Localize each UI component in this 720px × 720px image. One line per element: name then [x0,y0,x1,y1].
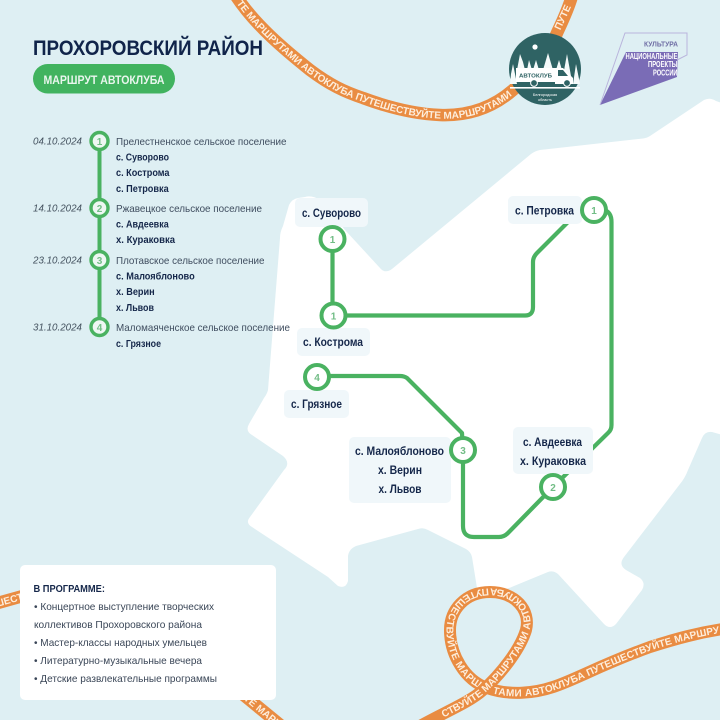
stop: Кострома: 1 [331,311,337,322]
stop: Кострома [322,304,346,328]
label: Грязное [284,390,349,418]
logo: national projects: РОССИИ [653,68,678,78]
label: Авдеевка: х. Кураковка [520,454,586,468]
stop: Петровка: 1 [591,206,597,217]
date 2: Ржавецкое сельское поселение [116,203,262,215]
ribbon: top: ПУТЕ [554,4,571,30]
date 2: 2 [97,204,103,215]
label: Малояблоново: х. Львов [378,482,422,496]
label: Суворово [295,198,368,227]
ribbon: top: ТЕ МАРШРУТАМИ АВТОКЛУБА ПУТЕШЕСТВУЙТЕ МАРШРУТАМИ [238,0,512,119]
route line [317,210,612,537]
program list: • Литературно-музыкальные вечера [34,655,202,667]
title: ПРОХОРОВСКИЙ РАЙОН [33,36,263,60]
date 1 [33,132,287,195]
label: Суворово: с. Суворово [302,206,361,220]
badge: route: МАРШРУТ АВТОКЛУБА [44,73,165,87]
logo: avtoklub: Белгородская [533,93,557,97]
logo: avtoklub: область [538,98,552,102]
date 3: 3 [97,256,103,267]
date 2: х. Кураковка [116,234,175,246]
date 3: 23.10.2024 [32,254,82,266]
date 4: с. Грязное [116,338,161,350]
stop: Петровка [582,198,606,222]
label: Малояблоново: х. Верин [378,463,422,477]
stop: Грязное: 4 [314,373,320,384]
stop: Авдеевка: 2 [550,483,556,494]
ribbon: bottom loop: ПУТЕШЕСТВУЙТЕ МАРШРУТАМИ АВТОКЛУБА ПУТЕШЕСТВУЙТЕ МАРШРУ [446,588,718,696]
logo: national projects: ПРОЕКТЫ [648,59,678,69]
logo: avtoklub [509,33,581,105]
date 4: 31.10.2024 [33,322,82,334]
label: Грязное: с. Грязное [291,397,342,411]
map: district shape [248,99,720,627]
date 4: 4 [97,323,103,334]
program list: коллективов Прохоровского района [34,619,202,631]
date 2: 14.10.2024 [33,202,82,214]
stop: Малояблоново: 3 [460,446,466,457]
label: Кострома [297,328,370,356]
stop: Суворово: 1 [330,235,336,246]
date 1: с. Суворово [116,152,169,164]
date 4: Маломаяченское сельское поселение [116,322,290,334]
stop: Суворово [320,227,344,251]
panel: program [20,565,276,700]
program heading: В ПРОГРАММЕ: [34,583,105,595]
ribbon: bottom loop: СТВУЙТЕ МАРШРУТАМИ АВТОКЛУБА [442,588,530,716]
date 3: с. Малояблоново [116,270,195,282]
date 1: 04.10.2024 [33,136,82,148]
label: Авдеевка [513,427,593,474]
label: Петровка [508,196,582,224]
label: Авдеевка: с. Авдеевка [523,435,582,449]
logo: national projects: КУЛЬТУРА [644,40,679,48]
date 1: с. Петровка [116,183,169,195]
date 3: х. Верин [116,286,155,298]
program list: • Мастер-классы народных умельцев [34,637,207,649]
logo: avtoklub: АВТОКЛУБ [519,74,552,80]
label: Кострома: с. Кострома [303,335,363,349]
program list: • Концертное выступление творческих [34,601,215,613]
date 1: с. Кострома [116,167,170,179]
schedule timeline [32,132,290,350]
date 3 [32,252,265,314]
program list [34,601,217,685]
label: Малояблоново: с. Малояблоново [355,444,444,458]
program list: • Детские развлекательные программы [34,673,217,685]
date 2 [33,200,262,246]
logo: national projects: НАЦИОНАЛЬНЫЕ [626,51,678,61]
stop: Малояблоново [451,438,475,462]
logo: national projects [600,33,687,105]
ribbon: bottom left [0,590,284,720]
date 1: 1 [97,137,103,148]
label: Малояблоново [349,437,451,503]
badge: route [33,64,175,94]
label: Петровка: с. Петровка [515,204,574,218]
date 4 [33,318,290,350]
date 2: с. Авдеевка [116,218,169,230]
stop: Авдеевка [541,475,565,499]
date 1: Прелестненское сельское поселение [116,136,287,148]
date 3: Плотавское сельское поселение [116,255,265,267]
stop: Грязное [305,365,329,389]
date 3: х. Львов [116,302,154,314]
